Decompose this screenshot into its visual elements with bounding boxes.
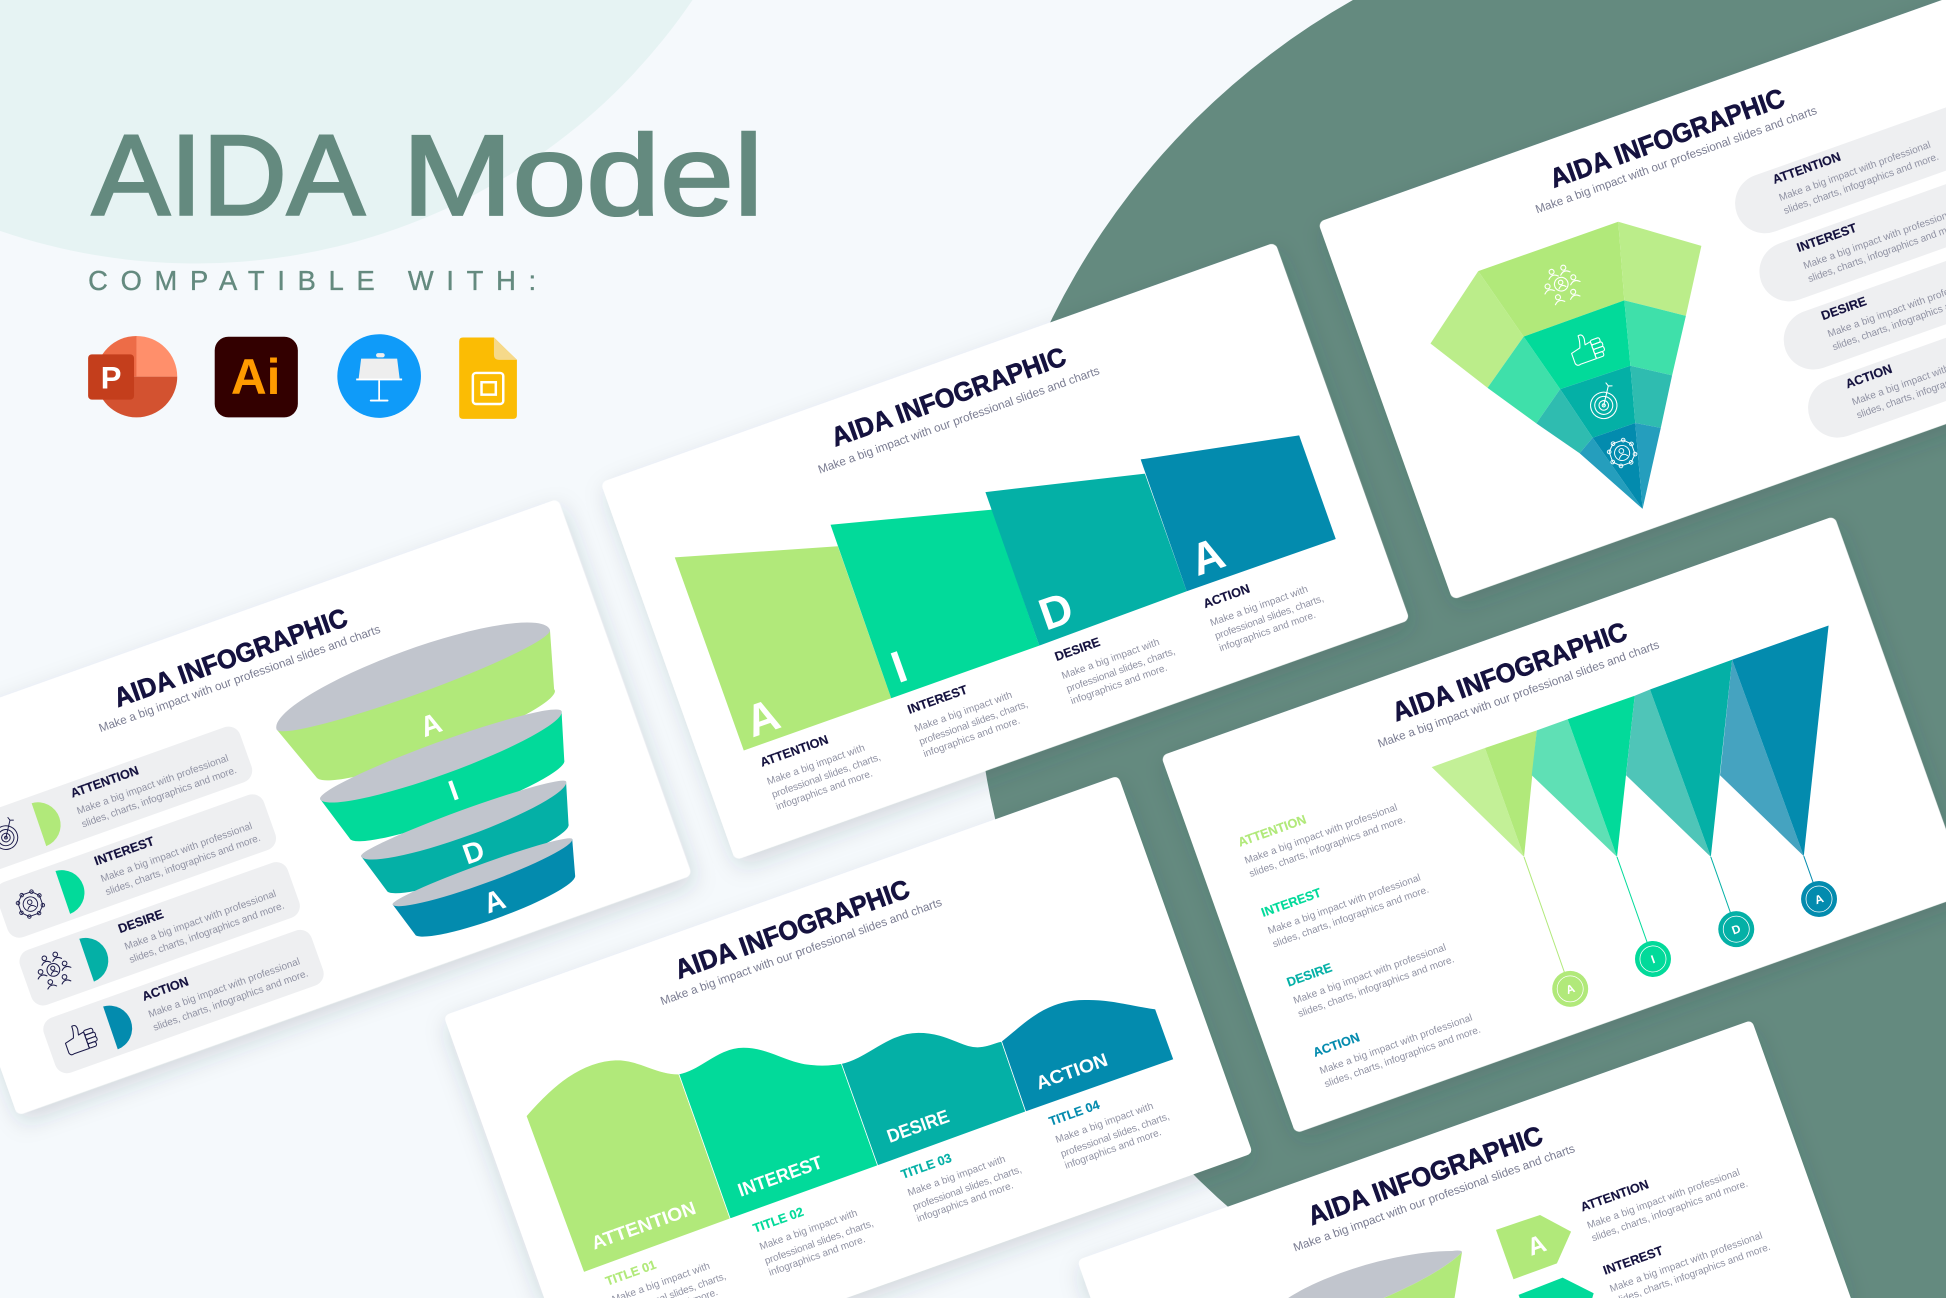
block text interest: professional slides, charts, [918, 699, 1030, 748]
desire row [16, 859, 303, 1009]
text title 03: infographics and more. [916, 1180, 1015, 1225]
slide subheading: Make a big impact with our professional slides and charts [816, 364, 1101, 477]
text title 02: TITLE 02 [751, 1205, 805, 1236]
icon: people [1538, 262, 1585, 307]
block text attention: ATTENTION [758, 733, 830, 770]
badge A: A [1524, 1230, 1550, 1262]
slide heading: AIDA INFOGRAPHIC [1304, 1120, 1546, 1231]
stepped blocks chart [675, 435, 1336, 750]
desire row [1775, 197, 1946, 378]
attention row: ATTENTION [69, 763, 141, 801]
interest row: Make a big impact with professional [99, 821, 254, 885]
block text interest: infographics and more. [922, 716, 1022, 760]
text desire: Make a big impact with professional [1292, 942, 1448, 1007]
desire row: slides, charts, infographics and more. [128, 901, 286, 966]
wave labels [589, 1049, 1110, 1253]
text interest: Make a big impact with professional [1267, 873, 1422, 937]
icon: Keynote [337, 334, 421, 418]
text action: Make a big impact with professional [1318, 1013, 1474, 1077]
wave chart [526, 1000, 1174, 1272]
icon: Google Slides [459, 338, 517, 419]
block text attention: professional slides, charts, [770, 752, 882, 801]
marker D [1718, 911, 1754, 947]
block text action: ACTION [1201, 582, 1252, 611]
stepped blocks chart: A [1184, 529, 1231, 586]
text attention: Make a big impact with professional [1243, 802, 1399, 867]
desire row: DESIRE [1819, 294, 1868, 323]
attention row: slides, charts, infographics and more. [1782, 152, 1940, 217]
text title 04: infographics and more. [1063, 1127, 1163, 1172]
text attention: ATTENTION [1236, 812, 1308, 850]
action row [1800, 265, 1946, 446]
text interest: INTEREST [1601, 1243, 1665, 1278]
stepped blocks chart: A [739, 690, 786, 747]
slide heading: AIDA INFOGRAPHIC [1546, 83, 1788, 194]
text title 04: TITLE 04 [1047, 1098, 1101, 1129]
interest row: INTEREST [1795, 221, 1859, 255]
text title 02 [751, 1184, 879, 1279]
block text attention [758, 718, 887, 813]
icon: network [1605, 436, 1640, 470]
attention row: Make a big impact with professional [1778, 140, 1932, 204]
text title 02: professional slides, charts, [763, 1218, 875, 1267]
desire row: Make a big impact with professional [123, 889, 278, 953]
block text interest: Make a big impact with [913, 690, 1014, 735]
icon: Illustrator [215, 337, 298, 417]
attention row [1727, 61, 1946, 242]
text title 04 [1047, 1077, 1175, 1172]
marker A: A [1813, 892, 1826, 907]
slide subheading: Make a big impact with our professional slides and charts [1376, 638, 1661, 751]
block text desire [1053, 612, 1181, 707]
slide card [1079, 1022, 1851, 1298]
funnel fragment [1288, 1251, 1462, 1298]
action row: ACTION [1844, 362, 1894, 391]
slide heading: AIDA INFOGRAPHIC [671, 874, 914, 985]
text interest: slides, charts, infographics and more. [1271, 884, 1430, 950]
text attention [1236, 781, 1407, 880]
subtitle: compatible with: COMPATIBLE WITH: [88, 265, 536, 296]
block text attention: Make a big impact with [766, 743, 866, 788]
text title 04: Make a big impact with [1054, 1101, 1155, 1146]
block text action: professional slides, charts, [1214, 593, 1325, 642]
panel: stepped blocks slide [601, 242, 1410, 860]
funnel letters: I [445, 775, 463, 808]
funnel letters: D [459, 834, 489, 871]
block text action: infographics and more. [1218, 610, 1317, 654]
dark green decorative circle [975, 0, 1946, 1298]
slide subheading: Make a big impact with our professional slides and charts [1534, 104, 1819, 216]
text title 03: Make a big impact with [906, 1154, 1007, 1199]
panel: funnel slide [0, 499, 692, 1115]
text title 03 [899, 1130, 1027, 1225]
attention row [0, 723, 256, 873]
text interest: Make a big impact with professional [1608, 1230, 1764, 1295]
text title 03: TITLE 03 [899, 1151, 954, 1182]
pale decorative circle [0, 0, 693, 264]
slide subheading: Make a big impact with our professional slides and charts [1292, 1142, 1577, 1254]
wave labels: DESIRE [884, 1105, 952, 1147]
text title 01: TITLE 01 [604, 1258, 658, 1289]
text desire [1285, 921, 1456, 1020]
action row: ACTION [140, 974, 190, 1004]
block text interest: INTEREST [906, 683, 969, 717]
block text interest [906, 665, 1034, 760]
marker I: I [1649, 953, 1657, 966]
icon: thumbs up [1567, 329, 1607, 366]
badge I [1519, 1278, 1594, 1298]
text attention: slides, charts, infographics and more. [1248, 814, 1407, 880]
panel: wave slide [445, 777, 1251, 1298]
text attention: Make a big impact with professional [1586, 1167, 1741, 1232]
text desire: DESIRE [1285, 961, 1334, 990]
funnel layer interest [316, 699, 583, 858]
block text attention: infographics and more. [775, 768, 874, 813]
block text desire: professional slides, charts, [1065, 646, 1177, 695]
panel: pyramids slide [1161, 516, 1946, 1133]
funnel letters [416, 707, 510, 920]
slide heading: AIDA INFOGRAPHIC [1388, 616, 1631, 727]
text interest [1601, 1209, 1772, 1298]
funnel layer attention [266, 602, 576, 802]
slide card [445, 777, 1251, 1298]
stepped blocks chart: I [885, 643, 913, 693]
marker I [1635, 941, 1671, 977]
interest row: slides, charts, infographics and more. [104, 833, 262, 898]
funnel chart [266, 602, 589, 950]
text title 01 [604, 1237, 732, 1298]
action row: slides, charts, infographics and more. [152, 968, 310, 1034]
block text action: Make a big impact with [1209, 584, 1310, 629]
marker A [1552, 971, 1588, 1007]
stepped blocks chart: D [1033, 583, 1080, 640]
diamond chart [1430, 222, 1701, 509]
slide subheading: Make a big impact with our professional slides and charts [659, 896, 944, 1008]
attention row: ATTENTION [1771, 150, 1843, 187]
panel: bottom slide [1079, 1022, 1851, 1298]
block text desire: infographics and more. [1069, 663, 1169, 707]
text action [1311, 991, 1482, 1090]
text action: slides, charts, infographics and more. [1323, 1024, 1482, 1090]
title [92, 113, 763, 240]
block text desire: Make a big impact with [1060, 637, 1161, 682]
attention row: Make a big impact with professional [76, 753, 230, 817]
triangle chart [1432, 625, 1829, 989]
marker D: D [1730, 922, 1743, 938]
action row [40, 926, 327, 1077]
slide card [601, 242, 1410, 860]
badge A [1496, 1215, 1571, 1279]
text interest: INTEREST [1259, 886, 1323, 920]
icon: PowerPoint: P [101, 360, 121, 395]
text action: ACTION [1311, 1030, 1362, 1060]
block text action [1201, 559, 1330, 654]
action row: Make a big impact with professional [147, 956, 302, 1020]
icon: Illustrator: Ai [231, 349, 280, 405]
text title 02: Make a big impact with [758, 1208, 859, 1253]
text title 04: professional slides, charts, [1059, 1111, 1171, 1160]
interest row: INTEREST [92, 834, 156, 868]
icon: target [1584, 381, 1622, 422]
text title 03: professional slides, charts, [911, 1164, 1023, 1213]
funnel letters: A [480, 883, 510, 920]
funnel layer desire [358, 773, 585, 909]
desire row: DESIRE [116, 907, 165, 936]
text attention: slides, charts, infographics and more. [1590, 1179, 1749, 1244]
wave labels: ATTENTION [589, 1197, 698, 1253]
slide heading: AIDA INFOGRAPHIC [827, 341, 1070, 452]
attention row: slides, charts, infographics and more. [80, 765, 238, 830]
icon: PowerPoint [88, 336, 177, 417]
text attention: ATTENTION [1579, 1177, 1651, 1214]
panel: diamond slide [1318, 0, 1946, 600]
slide heading: AIDA INFOGRAPHIC [110, 602, 351, 713]
interest row [0, 791, 279, 941]
text attention [1579, 1146, 1749, 1244]
slide card [0, 499, 692, 1115]
funnel letters: A [416, 707, 446, 744]
marker A: A [1564, 982, 1577, 997]
slide card [1161, 516, 1946, 1133]
block text desire: DESIRE [1053, 635, 1102, 664]
funnel layer action [390, 832, 589, 950]
slide subheading: Make a big impact with our professional slides and charts [97, 623, 382, 735]
text desire: slides, charts, infographics and more. [1297, 954, 1456, 1020]
interest row [1751, 129, 1946, 310]
marker A [1801, 881, 1837, 917]
slide card [1318, 0, 1946, 600]
title: Model [402, 113, 763, 240]
wave labels: INTEREST [735, 1151, 826, 1201]
text title 02: infographics and more. [767, 1234, 867, 1279]
text interest [1259, 851, 1430, 950]
wave labels: ACTION [1033, 1049, 1110, 1094]
title: AIDA [92, 113, 365, 240]
